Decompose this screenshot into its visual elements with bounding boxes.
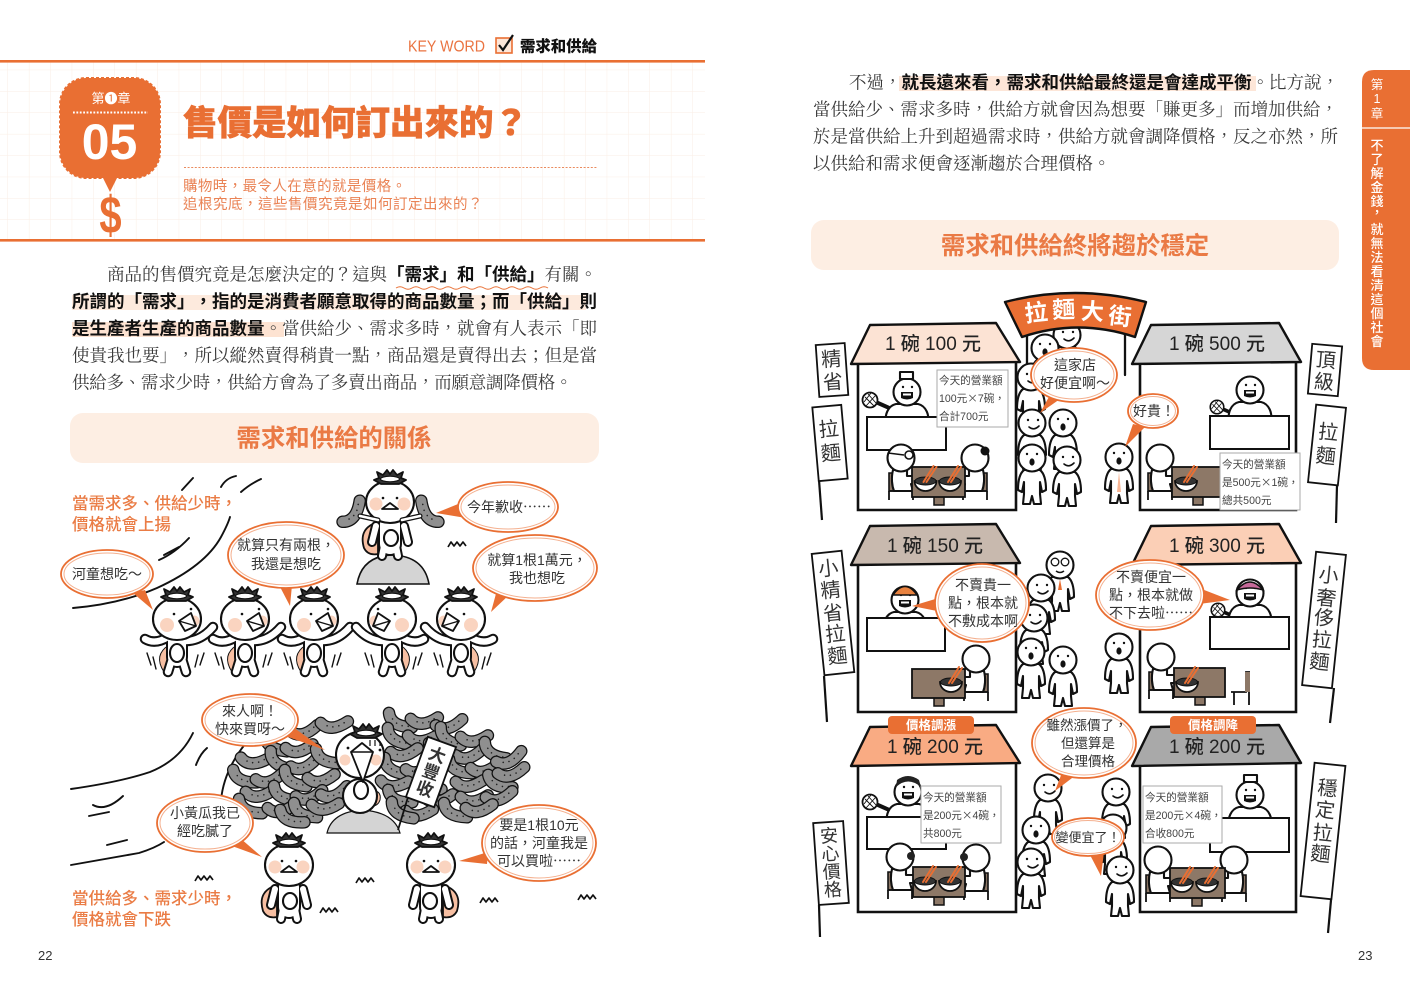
sign: small frugal ramen: 精 [820, 578, 842, 603]
intro paragraph: 使貴我也要」，所以縱然賣得稍貴一點，商品還是賣得出去；但是當 [72, 346, 597, 366]
crowd row 1 [1017, 322, 1133, 506]
bubble: not profitable: 點，根本就 [948, 595, 1018, 611]
sign arch: ramen street [1005, 293, 1146, 337]
badge: price raised [888, 716, 974, 734]
chapter side tab: 這 [1370, 292, 1384, 307]
shop: 200 yuan lowered: 1 碗 200 元 [1169, 736, 1265, 758]
chapter side tab: 了 [1370, 152, 1384, 167]
mound [327, 810, 400, 833]
title: 售價是如何訂出來的？ [183, 105, 528, 143]
badge: price lowered: 價格調降 [1188, 718, 1238, 732]
standing kappas [262, 833, 458, 919]
shop: 200 yuan raised: 1 碗 200 元 [887, 736, 983, 758]
grass [448, 542, 466, 547]
sign: ramen left: 拉 [818, 417, 840, 442]
mound [357, 555, 429, 584]
sign: stable ramen: 拉 [1312, 821, 1334, 846]
bubble: ten thousand yen: 就算1根1萬元， [487, 552, 587, 568]
intro paragraph: 所謂的「需求」，指的是消費者願意取得的商品數量；而「供給」則 [72, 292, 597, 312]
chapter side tab: 個 [1370, 306, 1384, 321]
sign: small frugal ramen: 麵 [826, 644, 849, 669]
caption: price rises: 當需求多、供給少時， [72, 494, 237, 513]
chapter header band [0, 60, 705, 244]
shop: 200 yuan lowered [1132, 716, 1301, 912]
shop signs [812, 343, 1346, 937]
bubble: expensive: 好貴！ [1133, 403, 1175, 419]
bubble: kappa wants: 河童想吃～ [72, 566, 142, 582]
bubble: come buy: 來人啊！ [222, 703, 278, 719]
right intro paragraph: 不過，就長遠來看，需求和供給最終還是會達成平衡。比方說， [849, 72, 1339, 92]
bubble: ten thousand yen [473, 535, 597, 612]
intro paragraph: 供給多、需求少時，供給方會為了多賣出商品，而願意調降價格。 [72, 372, 572, 392]
shop: 200 yuan lowered: 合收800元 [1145, 827, 1195, 840]
section heading: stability [811, 220, 1339, 270]
seller kappa [336, 724, 384, 813]
shop: 100 yuan: 合計700元 [939, 410, 989, 423]
bubble: not profitable [912, 564, 1029, 642]
sign: premium: 級 [1313, 370, 1335, 395]
chapter side tab: 章 [1371, 106, 1383, 121]
badge: price lowered [1170, 716, 1256, 734]
bubble: reasonable price: 合理價格 [1061, 754, 1115, 769]
sign: peace of mind price: 價 [822, 861, 841, 883]
sign: big harvest: 大 [426, 744, 448, 767]
bubble: reasonable price [1032, 708, 1136, 791]
bubble: if ten yen: 的話，河童我是 [490, 835, 588, 851]
bubble: got cheaper [1052, 818, 1124, 876]
bubble: cannot survive: 不下去啦…… [1109, 603, 1193, 623]
shop: 200 yuan raised: 今天的營業額 [923, 791, 987, 804]
page number 23: 23 [1358, 948, 1372, 963]
sign: big harvest: 豐 [420, 761, 442, 784]
sign: big harvest [398, 737, 456, 830]
bubble: reasonable price: 雖然漲價了， [1046, 717, 1128, 733]
sign: frugal [816, 343, 848, 397]
river bank lines [73, 476, 261, 608]
chapter side tab: 法 [1370, 250, 1384, 265]
shop: 300 yuan: 1 碗 300 元 [1169, 535, 1265, 557]
shop: 500 yuan: 今天的營業額 [1222, 458, 1286, 471]
shop: 200 yuan lowered: 今天的營業額 [1145, 791, 1209, 804]
icon: checkbox [496, 35, 513, 53]
bubble: if ten yen: 要是1根10元 [499, 817, 579, 833]
sign: stable ramen: 麵 [1309, 842, 1332, 867]
shop: 100 yuan: 100元×7碗， [939, 391, 1005, 406]
sign: peace of mind price [813, 821, 849, 937]
shop: 200 yuan raised: 是200元×4碗， [923, 808, 1000, 823]
shop: 500 yuan: 1 碗 500 元 [1169, 333, 1265, 355]
street scene poles [1027, 333, 1125, 375]
chapter summary: 購物時，最令人在意的就是價格。 [183, 177, 406, 195]
bubble: tired of cucumbers [157, 794, 262, 857]
section heading: supply and demand [70, 413, 599, 463]
sign: small luxury ramen: 麵 [1308, 650, 1331, 675]
shop: 300 yuan [1132, 524, 1301, 712]
chapter side tab: 社 [1370, 320, 1384, 335]
icon: dollar sign: $ [99, 186, 122, 244]
bubble: tired of cucumbers: 經吃膩了 [177, 823, 233, 839]
page number 22: 22 [38, 948, 52, 963]
intro paragraph: 商品的售價究竟是怎麼決定的？這與「需求」和「供給」有關。 [107, 264, 597, 284]
sign: small luxury ramen: 奢 [1315, 586, 1337, 611]
keyword text: 需求和供給 [520, 36, 598, 56]
chapter side tab: 金 [1370, 180, 1384, 195]
shop: 150 yuan [851, 524, 1020, 712]
cucumber pile [232, 710, 525, 824]
chapter side tab: 看 [1370, 264, 1384, 279]
shop: 100 yuan: 1 碗 100 元 [885, 333, 981, 355]
sign arch: ramen street: 大 [1080, 298, 1105, 325]
intro paragraph: 是生產者生產的商品數量。當供給少、需求多時，就會有人表示「即 [72, 318, 597, 338]
sign: peace of mind price: 格 [823, 879, 843, 901]
caption: price falls: 當供給多、需求少時， [72, 889, 237, 908]
bubble: if ten yen [459, 805, 596, 881]
chapter badge: 第❶章 [91, 91, 131, 106]
sign: peace of mind price: 安 [819, 825, 839, 847]
keyword tag [408, 35, 598, 56]
chapter side tab: ， [1370, 205, 1384, 220]
right intro paragraph: 於是當供給上升到超過需求時，供給方就會調降價格，反之亦然，所 [813, 126, 1338, 146]
sign: stable ramen: 穩 [1316, 776, 1339, 801]
sign: small luxury ramen: 侈 [1313, 606, 1335, 631]
sign: small luxury ramen: 小 [1318, 563, 1340, 588]
sign: premium [1308, 344, 1342, 396]
sign: stable ramen: 定 [1314, 798, 1336, 823]
sign: small frugal ramen: 拉 [824, 622, 846, 647]
sign: stable ramen [1301, 763, 1345, 933]
bubble: come buy [202, 694, 325, 750]
sign: small luxury ramen [1302, 552, 1346, 723]
shop: 200 yuan lowered: 是200元×4碗， [1145, 808, 1222, 823]
shop: 500 yuan: 是500元×1碗， [1222, 475, 1299, 490]
bubble: reasonable price: 但還算是 [1061, 736, 1115, 751]
bubble: not profitable: 不敷成本啊 [948, 613, 1018, 629]
shop: 500 yuan: 總共500元 [1222, 494, 1272, 507]
bubble: cannot survive: 點，根本就做 [1109, 587, 1193, 603]
intro paragraph [72, 264, 597, 392]
bubble: even two: 就算只有兩根， [237, 537, 335, 553]
crowd row 3 [1017, 774, 1134, 916]
bubble: cheap: 好便宜啊～ [1040, 375, 1110, 391]
bubble: come buy: 快來買呀～ [215, 721, 285, 737]
bubble: cheap: 這家店 [1054, 357, 1096, 373]
shop: 100 yuan [851, 323, 1020, 510]
sign: frugal: 省 [822, 370, 844, 395]
bubble: even two [228, 522, 344, 606]
sign: frugal: 精 [820, 347, 842, 372]
sign: small frugal ramen: 省 [822, 601, 844, 626]
bubble: even two: 我還是想吃 [251, 556, 321, 572]
bubble: cannot survive: 不賣便宜一 [1116, 569, 1186, 585]
river bank lines [71, 733, 246, 865]
sign: premium: 頂 [1315, 349, 1337, 373]
caption: price falls: 價格就會下跌 [72, 910, 172, 929]
caption: price rises: 價格就會上揚 [72, 515, 171, 534]
shop: 200 yuan raised [851, 716, 1020, 912]
right intro paragraph: 當供給少、需求多時，供給方就會因為想要「賺更多」而增加供給， [813, 100, 1338, 120]
sign arch: ramen street: 街 [1107, 302, 1133, 331]
section heading: stability: 需求和供給終將趨於穩定 [941, 233, 1209, 260]
buyer kappas [145, 587, 493, 672]
right intro paragraph: 以供給和需求便會逐漸趨於合理價格。 [813, 154, 1110, 174]
bubble: cannot survive [1096, 560, 1230, 630]
sign arch: ramen street: 拉 [1023, 299, 1049, 327]
bubble: expensive [1125, 394, 1178, 447]
chapter side tab: 無 [1370, 236, 1384, 251]
bubble: bad harvest: 今年歉收…… [467, 497, 551, 517]
keyword label: KEY WORD [408, 38, 485, 56]
bubble: ten thousand yen: 我也想吃 [509, 570, 565, 586]
seller kappa with two cucumbers [343, 470, 438, 556]
crowd row 2 [1017, 552, 1133, 706]
chapter summary: 追根究底，這些售價究竟是如何訂定出來的？ [183, 195, 483, 213]
sign: peace of mind price: 心 [821, 843, 840, 865]
sign: ramen right [1308, 405, 1346, 523]
bubble: got cheaper: 變便宜了！ [1055, 830, 1121, 845]
chapter badge: 05 [82, 114, 137, 170]
comic: high demand low supply [61, 470, 597, 672]
bubble: not profitable: 不賣貴一 [955, 577, 1011, 593]
bubble: if ten yen: 可以買啦…… [497, 851, 581, 871]
shop: 200 yuan raised: 共800元 [923, 828, 962, 840]
sign: ramen right: 拉 [1317, 420, 1339, 445]
shop: 150 yuan: 1 碗 150 元 [887, 535, 983, 557]
bubble: tired of cucumbers: 小黃瓜我已 [170, 805, 240, 821]
chapter side tab: 清 [1370, 278, 1384, 293]
sign: small frugal ramen: 小 [817, 556, 839, 581]
sign: ramen right: 麵 [1315, 444, 1337, 469]
chapter side tab: 就 [1370, 222, 1384, 237]
chapter side tab: 不 [1370, 138, 1384, 153]
chapter side tab [1362, 70, 1410, 370]
chapter side tab: 1 [1374, 92, 1381, 106]
shop: 500 yuan [1132, 323, 1301, 510]
right intro paragraph [813, 72, 1339, 174]
sign arch: ramen street: 麵 [1052, 296, 1076, 323]
bubble: kappa wants [61, 550, 153, 610]
chapter badge [60, 78, 160, 192]
grass [195, 876, 596, 913]
sign: small frugal ramen [812, 551, 854, 722]
sign: small luxury ramen: 拉 [1311, 628, 1333, 653]
section heading: supply and demand: 需求和供給的關係 [236, 424, 432, 452]
chapter side tab: 會 [1370, 334, 1384, 349]
comic: high supply low demand [71, 694, 596, 929]
chapter side tab: 解 [1370, 166, 1384, 181]
bubble: cheap [1031, 348, 1117, 413]
bubble: bad harvest [436, 482, 558, 532]
chapter side tab: 第 [1371, 77, 1383, 92]
chapter side tab: 錢 [1370, 194, 1384, 209]
sign: big harvest: 收 [413, 778, 436, 801]
badge: price raised: 價格調漲 [906, 718, 956, 732]
shop: 100 yuan: 今天的營業額 [939, 374, 1003, 387]
sign: ramen left [812, 405, 848, 520]
sign: ramen left: 麵 [820, 441, 842, 466]
